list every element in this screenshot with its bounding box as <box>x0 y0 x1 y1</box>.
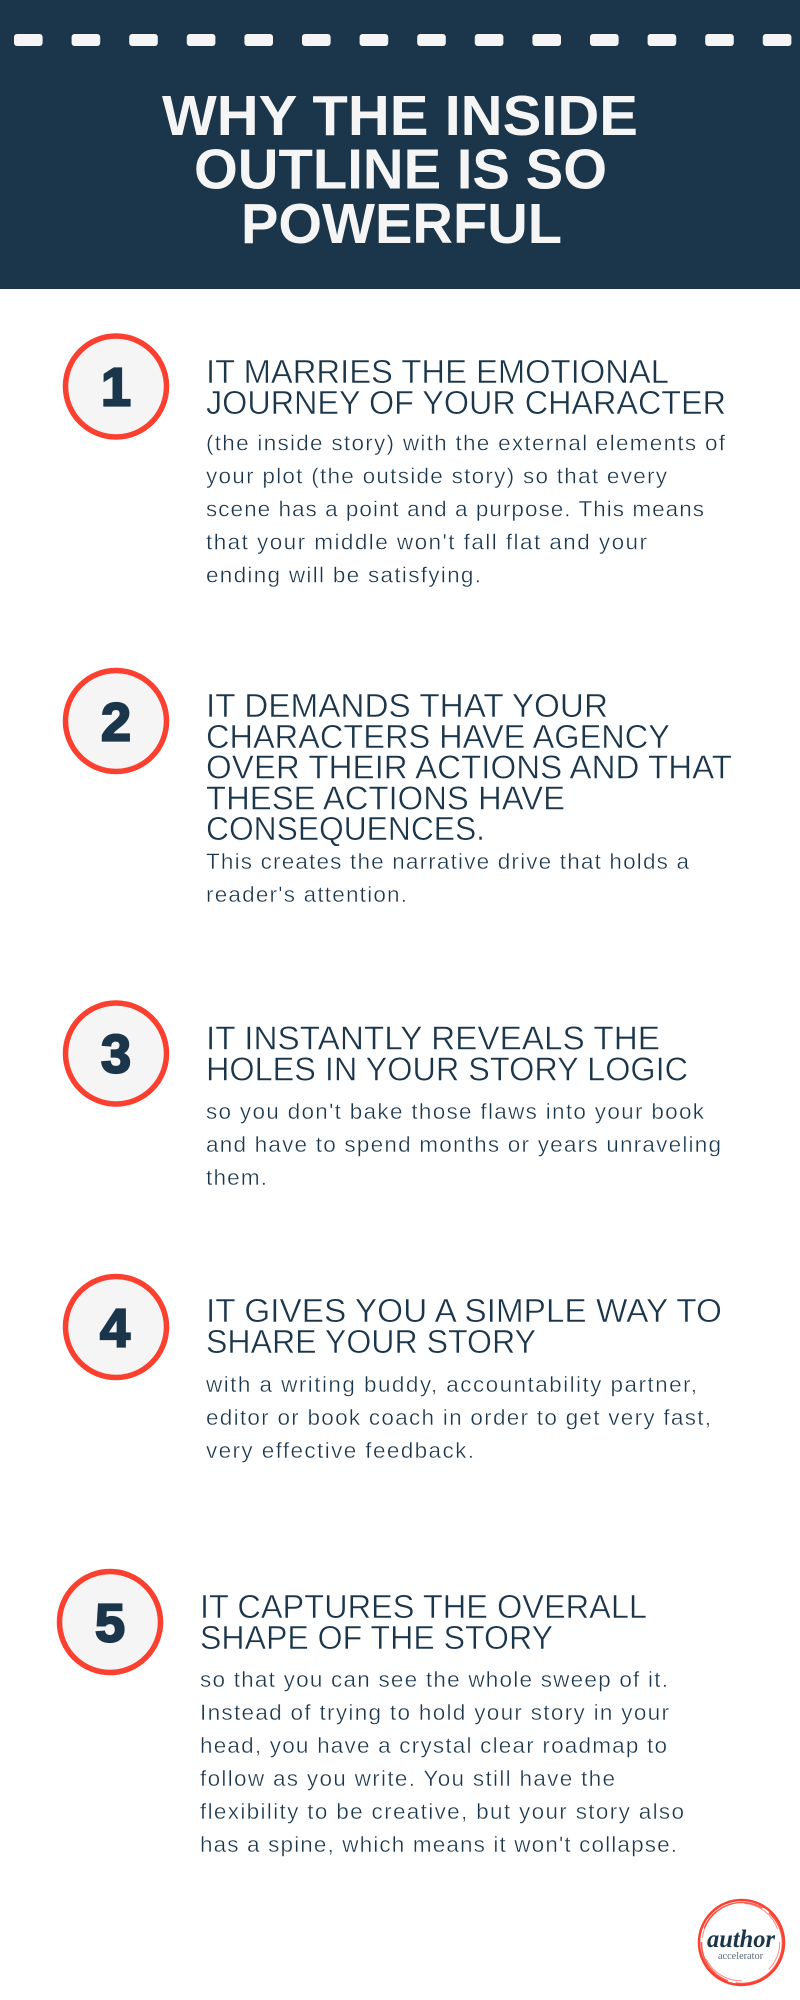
number badge 2: 2 <box>101 692 131 752</box>
number badge 2 <box>66 670 166 772</box>
item 4 <box>66 1276 722 1463</box>
body text 2: This creates the narrative drive that holds a <box>206 849 689 874</box>
body text 4: with a writing buddy, accountability partner, <box>205 1372 697 1397</box>
heading 1 <box>206 354 726 422</box>
body text 3 <box>206 1099 721 1190</box>
heading 1: IT MARRIES THE EMOTIONAL <box>206 354 669 391</box>
body text 5: Instead of trying to hold your story in your <box>200 1700 670 1725</box>
body text 3: them. <box>206 1165 267 1190</box>
title: POWERFUL <box>241 192 562 256</box>
title <box>162 84 638 256</box>
number badge 4 <box>66 1276 166 1378</box>
heading 2: CHARACTERS HAVE AGENCY <box>206 719 670 756</box>
heading 3: IT INSTANTLY REVEALS THE <box>206 1020 660 1058</box>
heading 4 <box>206 1293 722 1361</box>
number badge 4: 4 <box>100 1298 130 1358</box>
item 2 <box>66 670 732 907</box>
heading 4: SHARE YOUR STORY <box>206 1324 536 1361</box>
body text 5: has a spine, which means it won't collapse. <box>200 1832 677 1857</box>
heading 1: JOURNEY OF YOUR CHARACTER <box>206 385 726 422</box>
heading 2: IT DEMANDS THAT YOUR <box>206 688 608 725</box>
body text 5 <box>200 1667 684 1857</box>
body text 5: so that you can see the whole sweep of it. <box>200 1667 668 1692</box>
logo: author accelerator: author <box>707 1926 775 1953</box>
heading 3 <box>206 1020 688 1088</box>
title: WHY THE INSIDE <box>162 84 638 148</box>
body text 2 <box>206 849 689 907</box>
body text 1: ending will be satisfying. <box>206 562 481 588</box>
header banner <box>0 0 800 289</box>
heading 3: HOLES IN YOUR STORY LOGIC <box>206 1052 688 1088</box>
body text 1: (the inside story) with the external elements of <box>206 430 726 456</box>
body text 3: and have to spend months or years unraveling <box>206 1132 721 1157</box>
number badge 3: 3 <box>101 1024 131 1084</box>
heading 4: IT GIVES YOU A SIMPLE WAY TO <box>206 1293 722 1330</box>
body text 4: very effective feedback. <box>206 1438 474 1463</box>
body text 5: head, you have a crystal clear roadmap to <box>200 1733 667 1758</box>
body text 1: scene has a point and a purpose. This means <box>206 496 704 522</box>
number badge 5 <box>60 1572 160 1672</box>
body text 2: reader's attention. <box>206 882 407 907</box>
body text 1 <box>206 430 726 588</box>
item 5 <box>60 1572 684 1857</box>
heading 2: OVER THEIR ACTIONS AND THAT <box>206 750 732 786</box>
body text 5: follow as you write. You still have the <box>200 1766 615 1791</box>
heading 5 <box>200 1589 647 1657</box>
number badge 5: 5 <box>95 1594 125 1654</box>
heading 2: THESE ACTIONS HAVE <box>206 780 565 818</box>
heading 2: CONSEQUENCES. <box>206 811 485 848</box>
number badge 1 <box>66 336 166 437</box>
number badge 3 <box>66 1003 166 1104</box>
body text 4: editor or book coach in order to get very fast, <box>206 1405 711 1430</box>
logo: author accelerator: accelerator <box>718 1950 763 1962</box>
number badge 1: 1 <box>101 358 131 418</box>
title: OUTLINE IS SO <box>194 138 607 202</box>
body text 3: so you don't bake those flaws into your book <box>206 1099 705 1124</box>
item 3 <box>66 1003 721 1190</box>
body text 5: flexibility to be creative, but your story also <box>200 1799 684 1824</box>
body text 4 <box>205 1372 711 1463</box>
item 1 <box>66 336 726 588</box>
logo: author accelerator <box>699 1900 784 1985</box>
heading 5: SHAPE OF THE STORY <box>200 1620 553 1657</box>
body text 1: that your middle won't fall flat and your <box>206 530 648 554</box>
body text 1: your plot (the outside story) so that every <box>206 464 668 488</box>
heading 2 <box>206 688 732 848</box>
heading 5: IT CAPTURES THE OVERALL <box>200 1589 647 1626</box>
